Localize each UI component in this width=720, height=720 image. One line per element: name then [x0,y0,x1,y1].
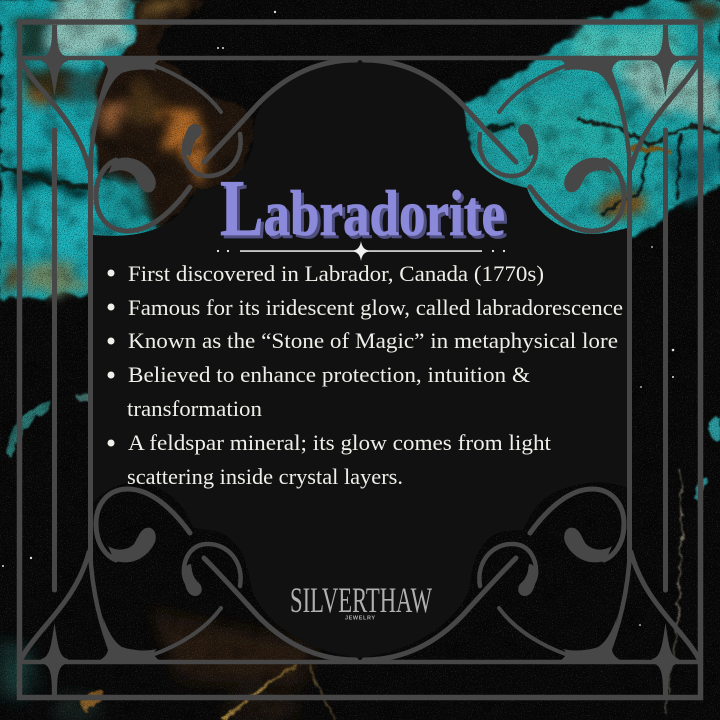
background: brown mineral [92,0,255,232]
background: right stone tones [520,0,720,220]
bullet 4: Believed to enhance protection, intuition & [128,362,530,387]
central dark panel [93,60,627,658]
ornament: top-right corner [364,25,699,590]
bullet 5 [108,430,551,489]
title: Labradorite [220,165,505,253]
bullet list [108,261,623,489]
title divider [217,241,505,261]
frame: inner horizontal lines [20,58,700,662]
bullet 2: Famous for its iridescent glow, called labradorescence [128,295,623,320]
background: white sparkles [2,11,674,626]
bullet 4: transformation [127,396,262,421]
bullet 4 [108,362,530,421]
background: brown tones [102,0,210,232]
logo: JEWELRY [345,616,375,622]
logo [290,580,432,622]
title: Labradorite [223,168,508,256]
background: right turquoise stone [465,0,720,240]
frame: inner vertical lines [90,160,630,560]
background: dim lower patches [0,610,320,720]
bullet 5: A feldspar mineral; its glow comes from light [128,430,551,455]
background: left stone tones [0,0,135,296]
ornament: bottom-right corner [364,130,699,695]
bullet 5: scattering inside crystal layers. [127,464,403,489]
ornament: top-left corner [21,25,356,590]
background: left turquoise stone [0,0,168,300]
bullet 1: First discovered in Labrador, Canada (1770s) [128,261,544,286]
logo: SILVERTHAW [290,580,432,620]
bullet 3: Known as the “Stone of Magic” in metaphysical lore [128,328,618,353]
ornament: bottom-left corner [21,130,356,695]
